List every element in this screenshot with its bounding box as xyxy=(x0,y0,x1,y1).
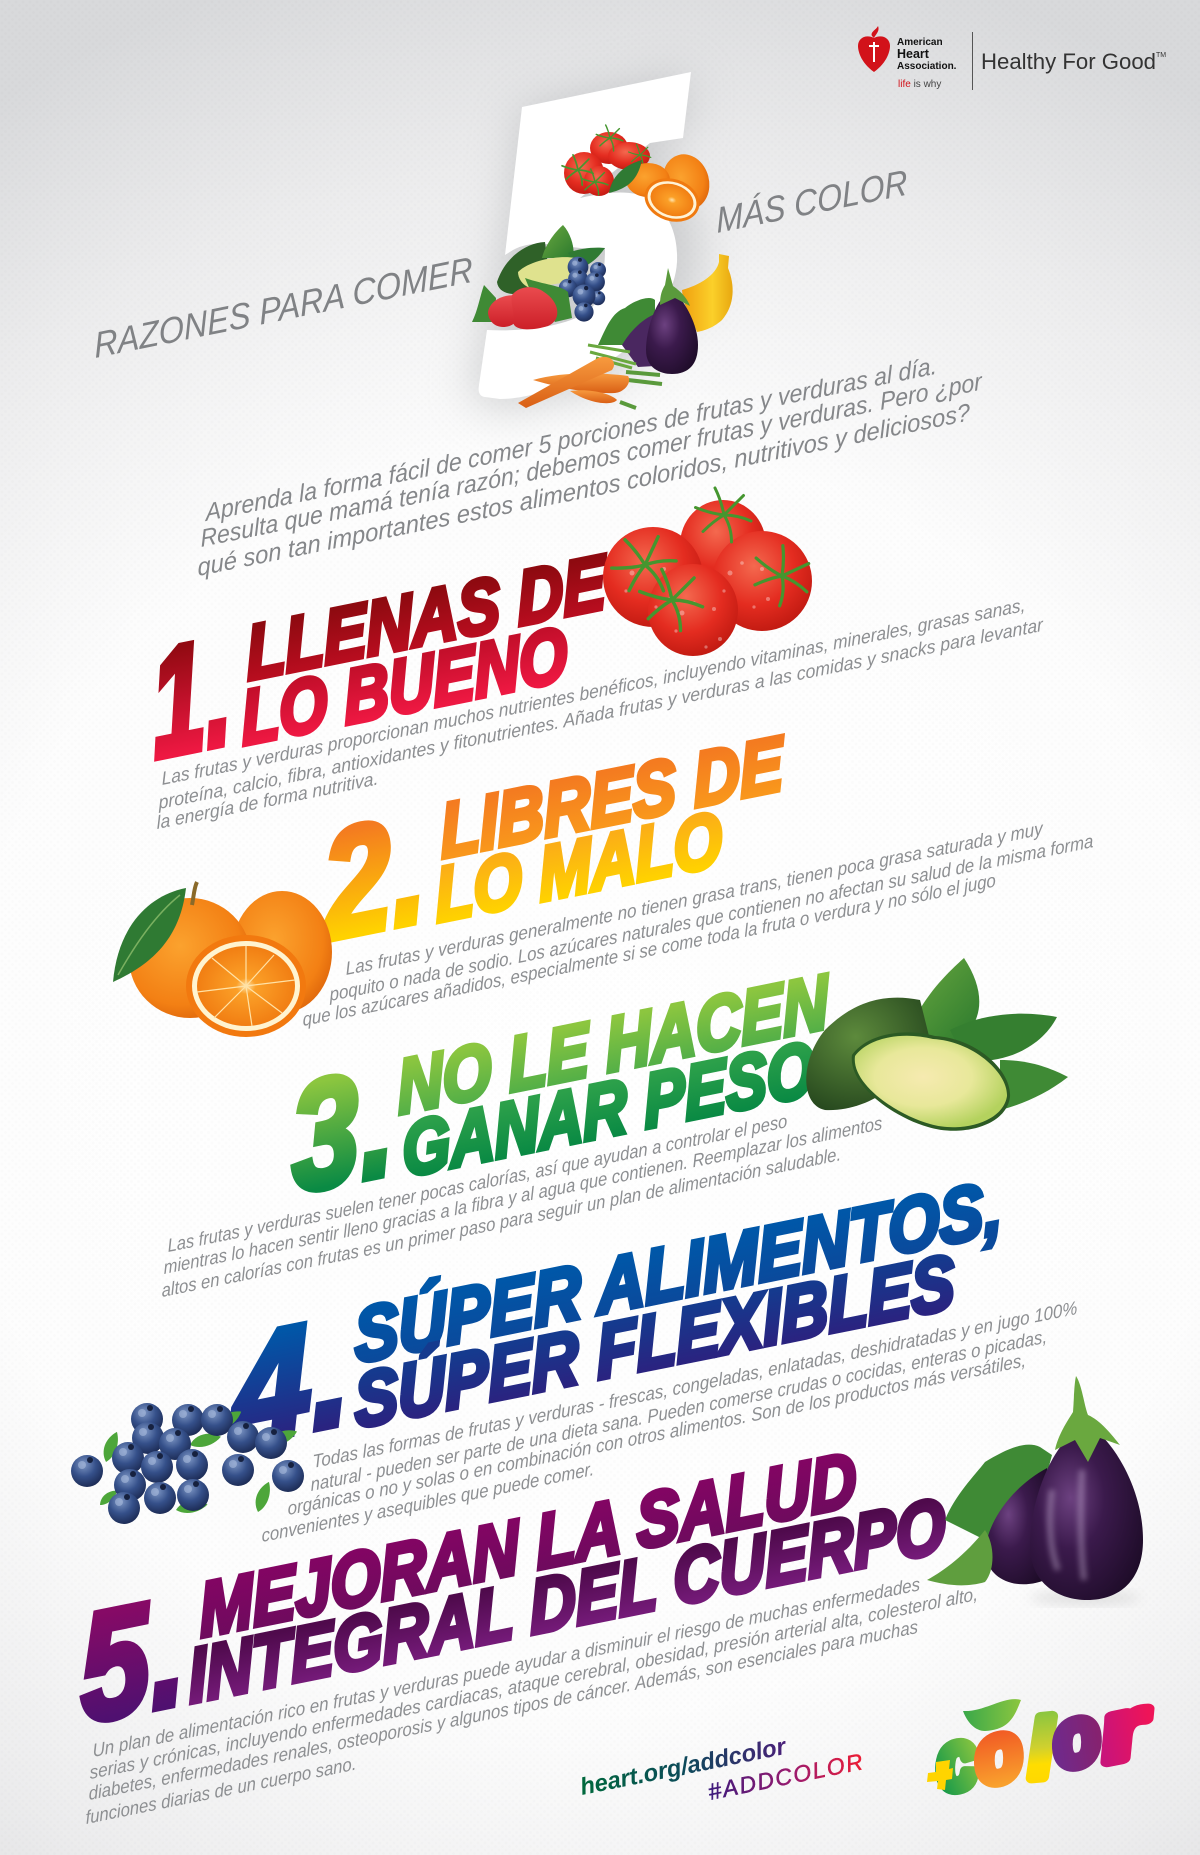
logo: American Heart Association: Association. xyxy=(897,61,957,72)
number 5 xyxy=(479,72,691,399)
icon: small strawberries xyxy=(472,278,572,329)
body text 4: natural - pueden ser parte de una dieta sana. Pueden comerse crudas o cocidas, enteras o picadas, xyxy=(310,1326,1047,1495)
body text 4: orgánicas o no y solas o en combinación con otros alimentos. Son de los productos más versátiles, xyxy=(287,1349,1026,1519)
logo: American Heart Association: Healthy For Good xyxy=(981,49,1156,74)
shadow of the 5 xyxy=(470,72,700,410)
logo: +color xyxy=(927,1680,1158,1810)
logo: American Heart Association: American xyxy=(897,37,943,48)
divider xyxy=(972,32,973,90)
heading: libres de lo malo xyxy=(433,720,787,939)
icon: small carrots xyxy=(518,345,662,408)
body text 4: convenientes y asequibles que puede comer. xyxy=(261,1458,595,1546)
logo: +color: o xyxy=(968,1704,1028,1803)
icon: oranges xyxy=(113,882,332,1037)
panel: reason 1 xyxy=(147,488,1044,833)
icon: blueberries xyxy=(71,1403,304,1524)
logo: American Heart Association: life is why xyxy=(898,79,941,90)
intro text: Resulta que mamá tenía razón; debemos comer frutas y verduras. Pero ¿por xyxy=(200,368,984,553)
heading: mejoran la salud integral del cuerpo: MEJORAN LA SALUD xyxy=(197,1436,859,1654)
heading: súper alimentos, súper flexibles: SÚPER ALIMENTOS, xyxy=(352,1164,1004,1380)
logo: +color: c xyxy=(929,1712,983,1810)
logo: American Heart Association: TM xyxy=(1156,52,1166,59)
number 3: 3. xyxy=(286,1035,398,1226)
heading: llenas de lo bueno: LLENAS DE xyxy=(244,539,610,697)
icon: small banana xyxy=(682,254,733,332)
logo: +color: o xyxy=(1046,1688,1106,1787)
body text 3: altos en calorías con frutas es un primer paso para seguir un plan de alimentación saludable. xyxy=(161,1143,842,1301)
icon: red heart xyxy=(858,36,890,72)
website link: heart.org/addcolor xyxy=(578,1733,790,1801)
icon: small avocado and leaves xyxy=(497,225,605,294)
hero: big white number 5 with fruit xyxy=(470,72,733,410)
number 1: 1. xyxy=(147,605,235,791)
panel: reason 4 xyxy=(71,1164,1078,1546)
number 5: 5. xyxy=(75,1565,189,1756)
icon: small leafy greens xyxy=(598,298,655,345)
body text 3: Las frutas y verduras suelen tener pocas calorías, así que ayudan a controlar el peso xyxy=(167,1110,788,1256)
heading: no le hacen ganar peso xyxy=(395,959,832,1194)
body text 1: Las frutas y verduras proporcionan muchos nutrientes benéficos, incluyendo vitaminas, minerales, grasas sanas, xyxy=(161,594,1026,789)
heading: no le hacen ganar peso: NO LE HACEN xyxy=(395,959,832,1131)
intro text: Aprenda la forma fácil de comer 5 porciones de frutas y verduras al día. xyxy=(203,352,938,527)
panel: reason 5 xyxy=(75,1376,1143,1828)
body text 5: funciones diarias de un cuerpo sano. xyxy=(85,1752,357,1828)
icon: small oranges xyxy=(609,149,715,229)
body text 1: la energía de forma nutritiva. xyxy=(156,767,379,833)
icon: eggplants xyxy=(927,1376,1143,1604)
logo: +color: r xyxy=(1094,1680,1158,1780)
hashtag: #ADDCOLOR xyxy=(706,1748,865,1805)
icon: tomatoes xyxy=(603,488,819,656)
icon: avocado xyxy=(806,958,1068,1131)
body text 3: mientras lo hacen sentir lleno gracias a la fibra y al agua que contienen. Reemplazar los alimentos xyxy=(163,1112,883,1278)
number 4: 4. xyxy=(225,1284,354,1479)
icon: small blueberries xyxy=(559,257,606,322)
heading: libres de lo malo: LIBRES DE xyxy=(438,720,787,875)
panel: reason 2 xyxy=(113,720,1094,1037)
body text 5: Un plan de alimentación rico en frutas y verduras puede ayudar a disminuir el riesgo de muchas enfermedades xyxy=(92,1573,921,1761)
body text 2: poquito o nada de sodio. Los azúcares naturales que contienen no afectan su salud de la misma forma xyxy=(328,830,1094,1005)
number 2: 2. xyxy=(315,782,430,974)
heading: mejoran la salud integral del cuerpo: INTEGRAL DEL CUERPO xyxy=(186,1482,948,1720)
title left: razones para comer: RAZONES PARA COMER xyxy=(93,249,474,366)
body text 4: Todas las formas de frutas y verduras - frescas, congeladas, enlatadas, deshidratadas y en jugo 100% xyxy=(312,1297,1078,1472)
icon: small eggplant xyxy=(622,268,698,374)
icon: small tomatoes xyxy=(562,125,651,196)
logo: American Heart Association xyxy=(858,26,1166,90)
heading: libres de lo malo: LO MALO xyxy=(433,796,724,939)
heading: súper alimentos, súper flexibles: SÚPER FLEXIBLES xyxy=(352,1239,957,1445)
panel: reason 3 xyxy=(161,958,1068,1301)
body text 1: proteína, calcio, fibra, antioxidantes y fitonutrientes. Añada frutas y verduras a las comidas y snacks para levantar xyxy=(157,614,1044,813)
body text 2: Las frutas y verduras generalmente no tienen grasa trans, tienen poca grasa saturada y muy xyxy=(345,817,1045,979)
body text 5: serias y crónicas, incluyendo enfermedades cardiacas, ataque cerebral, obesidad, presión arterial alta, colesterol alto, xyxy=(89,1583,978,1783)
heading: llenas de lo bueno: LO BUENO xyxy=(239,611,569,762)
title right: más color: MÁS COLOR xyxy=(715,161,909,241)
logo: +color: l xyxy=(1026,1703,1057,1796)
heading: no le hacen ganar peso: GANAR PESO xyxy=(400,1026,817,1194)
body text 2: que los azúcares añadidos, especialmente si se come toda la fruta o verdura y no sólo el jugo xyxy=(302,869,996,1030)
leaf xyxy=(963,1699,1021,1731)
intro text: qué son tan importantes estos alimentos coloridos, nutritivos y deliciosos? xyxy=(197,399,971,582)
plus sign xyxy=(927,1760,953,1790)
heading: llenas de lo bueno xyxy=(239,539,610,762)
logo: American Heart Association: Heart xyxy=(897,47,930,61)
body text 5: diabetes, enfermedades renales, osteoporosis y algunos tipos de cáncer. Además, son esenciales para muchas xyxy=(88,1616,919,1804)
